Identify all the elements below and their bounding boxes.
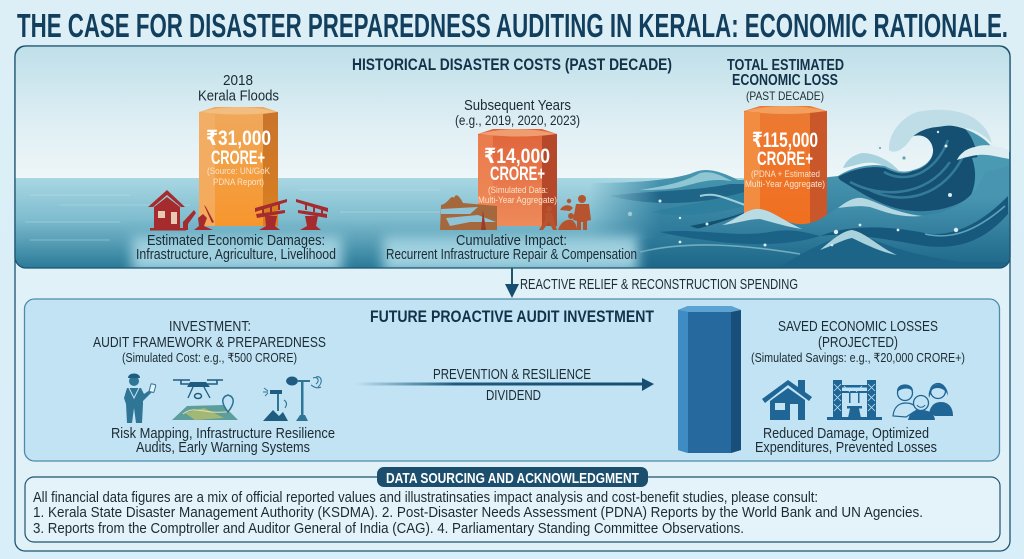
column label: 2018 Kerala Floods: Kerala Floods xyxy=(198,88,279,104)
heading: historical disaster costs: HISTORICAL DISASTER COSTS (PAST DECADE) xyxy=(352,56,672,74)
label: dividend: DIVIDEND xyxy=(486,388,541,404)
heading: future proactive audit: FUTURE PROACTIVE AUDIT INVESTMENT xyxy=(370,308,654,326)
bar: 2018 floods xyxy=(199,107,278,226)
text: damages caption: Estimated Economic Damages: xyxy=(147,233,325,249)
text: cumulative impact caption xyxy=(386,233,637,263)
icon: damaged house xyxy=(148,190,214,230)
bar values: total loss: Multi-Year Aggregate) xyxy=(745,179,825,189)
bar: subsequent years: CRORE+ xyxy=(490,163,545,185)
bar: 2018 floods: (Source: UN/GoK xyxy=(207,166,270,176)
text: sources: All financial data figures are a mix of official reported values and illustratinsaties impact analysis and cost-benefit studies, please consult: xyxy=(33,489,818,506)
text: saved economic losses: SAVED ECONOMIC LOSSES xyxy=(778,319,938,335)
front swell xyxy=(698,170,1010,245)
panel: historical disaster costs xyxy=(15,46,1010,272)
icon: early warning station xyxy=(263,376,321,421)
text: saved economic losses: (Simulated Savings: e.g., ₹20,000 CRORE+) xyxy=(751,351,965,365)
foreground waves xyxy=(132,110,1010,272)
bar: 2018 floods: ₹31,000 xyxy=(206,127,271,150)
column label: 2018 Kerala Floods xyxy=(198,72,279,104)
bar: subsequent years: (Simulated Data: xyxy=(488,185,548,195)
column label: 2018 Kerala Floods: 2018 xyxy=(223,72,253,89)
bar: total estimated loss xyxy=(744,106,827,228)
bar values: total loss: CRORE+ xyxy=(757,148,813,170)
text glow left xyxy=(132,236,342,272)
column label: subsequent years xyxy=(455,98,580,128)
right foam xyxy=(957,145,1009,160)
column label: total loss: ECONOMIC LOSS xyxy=(732,72,838,89)
badge: data sourcing heading: DATA SOURCING AND ACKNOWLEDGMENT xyxy=(386,470,639,487)
right wave face xyxy=(971,157,981,194)
text: risk mapping caption: Risk Mapping, Infrastructure Resilience xyxy=(111,425,335,442)
deep curl of big wave xyxy=(838,125,978,211)
column label: total loss: (PAST DECADE) xyxy=(746,89,824,103)
text: cumulative impact caption: Cumulative Impact: xyxy=(456,233,567,249)
text: investment: AUDIT FRAMEWORK & PREPAREDNESS xyxy=(93,335,326,351)
text: investment xyxy=(93,319,326,365)
bar: 2018 floods: PDNA Report) xyxy=(213,177,264,187)
text: risk mapping caption: Audits, Early Warning Systems xyxy=(136,439,310,456)
icon: eroded landscape xyxy=(440,195,497,230)
bar: saved losses xyxy=(678,306,741,453)
icon: inspector xyxy=(124,374,156,423)
text: risk mapping caption xyxy=(111,425,335,456)
icon: safe house xyxy=(762,380,812,420)
label: reactive spending: REACTIVE RELIEF & RECONSTRUCTION SPENDING xyxy=(520,277,798,293)
label: prevention and resilience: PREVENTION & RESILIENCE xyxy=(433,367,591,383)
bar: subsequent years: ₹14,000 xyxy=(484,145,550,168)
text: sources: 1. Kerala State Disaster Management Authority (KSDMA). 2. Post-Disaster Needs Assessment (PDNA) Reports by the World Bank and UN Agencies. xyxy=(33,504,923,521)
text glow centre xyxy=(383,236,638,272)
text: cumulative impact caption: Recurrent Infrastructure Repair & Compensation xyxy=(386,247,637,263)
column label: total loss xyxy=(727,57,844,103)
column label: total loss: TOTAL ESTIMATED xyxy=(727,57,844,74)
icon: infrastructure tower xyxy=(827,380,882,420)
sea and sky scene xyxy=(15,46,1010,268)
panel: data sourcing xyxy=(25,467,1000,542)
panel: future proactive audit investment xyxy=(24,299,1000,461)
column label: subsequent years: Subsequent Years xyxy=(464,98,571,114)
arrow: down to proactive audit xyxy=(505,268,519,298)
text: saved economic losses: (PROJECTED) xyxy=(818,335,898,351)
bar values: total loss xyxy=(745,129,825,189)
text: investment: INVESTMENT: xyxy=(169,319,251,335)
text: reduced damage caption: Expenditures, Prevented Losses xyxy=(755,439,937,456)
text: reduced damage caption: Reduced Damage, Optimized xyxy=(763,425,929,442)
bar: 2018 floods: CRORE+ xyxy=(211,147,265,169)
text: sources xyxy=(33,489,923,537)
text: investment: (Simulated Cost: e.g., ₹500 CRORE) xyxy=(122,351,297,365)
icon: broken bridge xyxy=(255,199,328,230)
bar: subsequent years xyxy=(478,129,557,226)
text: reduced damage caption xyxy=(755,425,937,456)
left foam xyxy=(843,153,900,172)
top foam xyxy=(889,110,992,152)
text: saved economic losses xyxy=(751,319,965,365)
bar values: total loss: (PDNA + Estimated xyxy=(751,169,820,179)
text: damages caption: Infrastructure, Agriculture, Livelihood xyxy=(136,247,336,263)
bar: subsequent years: Multi-Year Aggregate) xyxy=(478,195,557,205)
arrow: dividend xyxy=(355,378,654,391)
icon: drone over map xyxy=(172,380,238,420)
bar values: total loss: ₹115,000 xyxy=(752,129,818,152)
icon: happy people xyxy=(893,384,953,420)
text: sources: 3. Reports from the Comptroller and Auditor General of India (CAG). 4. Parliamentary Standing Committee Observations. xyxy=(33,520,744,537)
column label: subsequent years: (e.g., 2019, 2020, 2023) xyxy=(455,112,580,128)
icon: affected people xyxy=(539,195,591,230)
text: damages caption xyxy=(136,233,336,263)
